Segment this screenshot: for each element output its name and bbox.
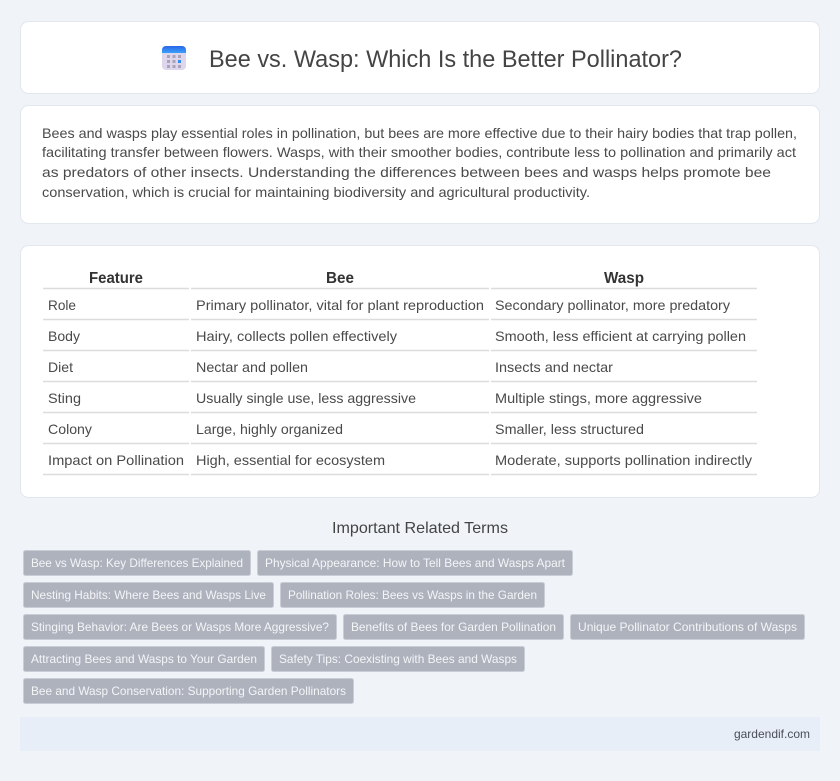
tag bbox=[24, 550, 250, 576]
table row: Impact on Pollination: Moderate, supports pollination indirectly bbox=[495, 452, 752, 468]
table row: Body: Body bbox=[48, 328, 80, 344]
tag bbox=[280, 582, 544, 608]
tag: Nesting Habits: Where Bees and Wasps Live bbox=[31, 588, 266, 602]
table row: Diet: Nectar and pollen bbox=[196, 359, 308, 375]
tag: Bee vs Wasp: Key Differences Explained bbox=[31, 556, 243, 570]
title: Bee vs. Wasp: Which Is the Better Pollinator? bbox=[209, 46, 682, 73]
text block: introduction bbox=[42, 125, 797, 200]
tag: Stinging Behavior: Are Bees or Wasps More Aggressive? bbox=[31, 620, 329, 634]
tag bbox=[570, 614, 804, 640]
table row: Colony bbox=[48, 421, 644, 437]
table header: Bee bbox=[326, 270, 354, 287]
text block: introduction: facilitating transfer between flowers. Wasps, with their smoother bodies, contribute less to pollination and primarily act bbox=[42, 144, 796, 160]
table row: Sting: Usually single use, less aggressive bbox=[196, 390, 416, 406]
footer bbox=[20, 717, 820, 751]
table row: Body: Hairy, collects pollen effectively bbox=[196, 328, 397, 344]
panel: introduction bbox=[20, 106, 820, 224]
text block: introduction: Bees and wasps play essential roles in pollination, but bees are more effective due to their hairy bodies that trap pollen, bbox=[42, 125, 797, 141]
table row: Impact on Pollination: Impact on Pollination bbox=[48, 452, 184, 468]
table row: Colony: Large, highly organized bbox=[196, 421, 343, 437]
tag bbox=[24, 614, 336, 640]
table row: Sting: Multiple stings, more aggressive bbox=[495, 390, 702, 406]
table row: Colony: Smaller, less structured bbox=[495, 421, 644, 437]
tag bbox=[24, 678, 354, 704]
table header: Feature bbox=[89, 270, 143, 287]
tag bbox=[272, 646, 524, 672]
table row: Impact on Pollination bbox=[48, 452, 752, 468]
tag: Bee and Wasp Conservation: Supporting Garden Pollinators bbox=[31, 684, 346, 698]
table row: Body: Smooth, less efficient at carrying pollen bbox=[495, 328, 746, 344]
table row: Role bbox=[48, 297, 730, 313]
table row: Diet: Insects and nectar bbox=[495, 359, 613, 375]
table row: Colony: Colony bbox=[48, 421, 92, 437]
tag bbox=[258, 550, 572, 576]
table row: Role: Primary pollinator, vital for plant reproduction bbox=[196, 297, 484, 313]
tag: Benefits of Bees for Garden Pollination bbox=[351, 620, 556, 634]
table row: Sting bbox=[48, 390, 702, 406]
footer: source: gardendif.com bbox=[734, 727, 810, 741]
heading: related terms: Important Related Terms bbox=[332, 520, 508, 537]
table header bbox=[89, 270, 644, 287]
tag bbox=[344, 614, 564, 640]
text block: introduction: as predators of other insects. Understanding the differences between bees and wasps helps promote bee bbox=[42, 164, 771, 180]
table header: Wasp bbox=[604, 270, 644, 287]
table row: Diet: Diet bbox=[48, 359, 73, 375]
tag: Physical Appearance: How to Tell Bees and Wasps Apart bbox=[265, 556, 566, 570]
table row: Impact on Pollination: High, essential for ecosystem bbox=[196, 452, 385, 468]
tag: Safety Tips: Coexisting with Bees and Wasps bbox=[279, 652, 517, 666]
tag bbox=[24, 646, 264, 672]
tag: Unique Pollinator Contributions of Wasps bbox=[578, 620, 797, 634]
tag bbox=[24, 582, 274, 608]
panel: header bbox=[20, 22, 820, 94]
icon: calendar bbox=[162, 46, 186, 70]
table row: Sting: Sting bbox=[48, 390, 81, 406]
tag: Pollination Roles: Bees vs Wasps in the Garden bbox=[288, 588, 537, 602]
table row: Diet bbox=[48, 359, 613, 375]
panel: comparison table bbox=[20, 246, 820, 498]
table row: Role: Secondary pollinator, more predatory bbox=[495, 297, 730, 313]
table row: Role: Role bbox=[48, 297, 76, 313]
related term tags bbox=[24, 550, 804, 704]
text block: introduction: conservation, which is crucial for maintaining biodiversity and agricultural productivity. bbox=[42, 184, 590, 200]
tag: Attracting Bees and Wasps to Your Garden bbox=[31, 652, 257, 666]
table row: Body bbox=[48, 328, 746, 344]
